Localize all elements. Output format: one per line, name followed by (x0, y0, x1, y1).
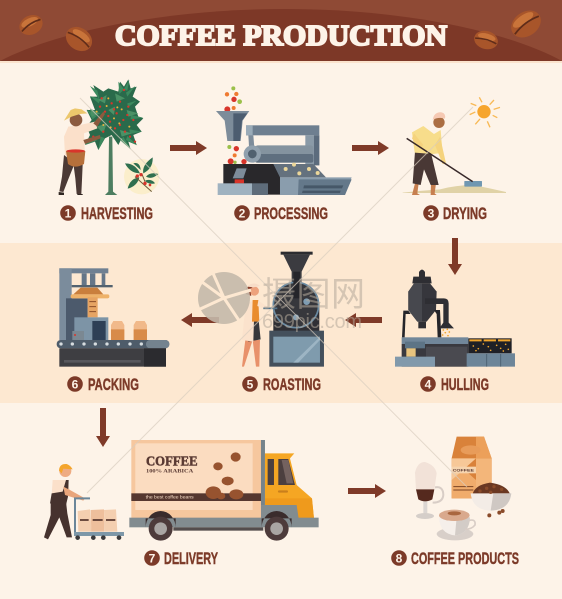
step 2 label (234, 205, 328, 223)
arrow 4 to 5 (345, 313, 382, 327)
step 7 illustration: delivery truck: the best coffee beans (146, 495, 194, 500)
step 7 label: 7 (149, 552, 156, 566)
watermark (80, 98, 473, 493)
step 7 label: DELIVERY (164, 550, 218, 568)
arrow 5 to 6 (181, 313, 219, 327)
step 4 label (420, 376, 489, 394)
step 8 label: 8 (396, 552, 403, 566)
step 6 illustration: packing (57, 268, 169, 367)
step 7 illustration: delivery truck (129, 440, 319, 541)
step 5 label: ROASTING (263, 376, 321, 394)
step 6 label (67, 376, 139, 394)
step 6 label: PACKING (88, 376, 139, 394)
step 4 label: 4 (425, 378, 432, 392)
arrow 7 to 8 (348, 484, 386, 498)
step 5 illustration: roasting (242, 252, 324, 367)
step 2 label: 2 (239, 206, 246, 220)
arrow 1 to 2 (170, 141, 207, 155)
step 5 label: 5 (247, 378, 254, 392)
step 7 illustration: delivery truck: 100% ARABICA (146, 469, 194, 474)
step 3 label (423, 205, 487, 223)
step 7 illustration: delivery truck: COFFEE (146, 453, 198, 468)
step 8 illustration: coffee products (415, 437, 511, 540)
step 1 label (60, 205, 153, 223)
arrow 3 to 4 (448, 238, 462, 275)
step 2 illustration: processing (216, 86, 352, 195)
title: COFFEE PRODUCTION (115, 21, 447, 52)
step 7 illustration: worker with trolley (44, 464, 124, 540)
step 4 label: HULLING (441, 376, 489, 394)
arrow 6 to 7 (96, 408, 110, 447)
step 8 label (391, 550, 519, 568)
step 4 illustration: hulling (395, 270, 515, 367)
step 1 label: HARVESTING (81, 205, 153, 223)
watermark: 699pic.com (262, 311, 362, 333)
icon: coffee beans in header (16, 5, 546, 56)
arrow 2 to 3 (352, 141, 389, 155)
watermark: 摄图网 (262, 276, 365, 314)
step 5 label (242, 376, 321, 394)
step 8 illustration: coffee products: COFFEE (453, 468, 474, 473)
middle band background (0, 243, 562, 403)
step 3 label: 3 (428, 206, 435, 220)
step 1 label: 1 (65, 206, 72, 220)
step 3 label: DRYING (443, 205, 487, 223)
step 7 label (144, 550, 218, 568)
step 2 label: PROCESSING (254, 205, 328, 223)
step 1 illustration: harvesting (59, 79, 159, 195)
step 6 label: 6 (72, 378, 79, 392)
header banner (0, 0, 562, 63)
step 3 illustration: drying (403, 97, 506, 195)
